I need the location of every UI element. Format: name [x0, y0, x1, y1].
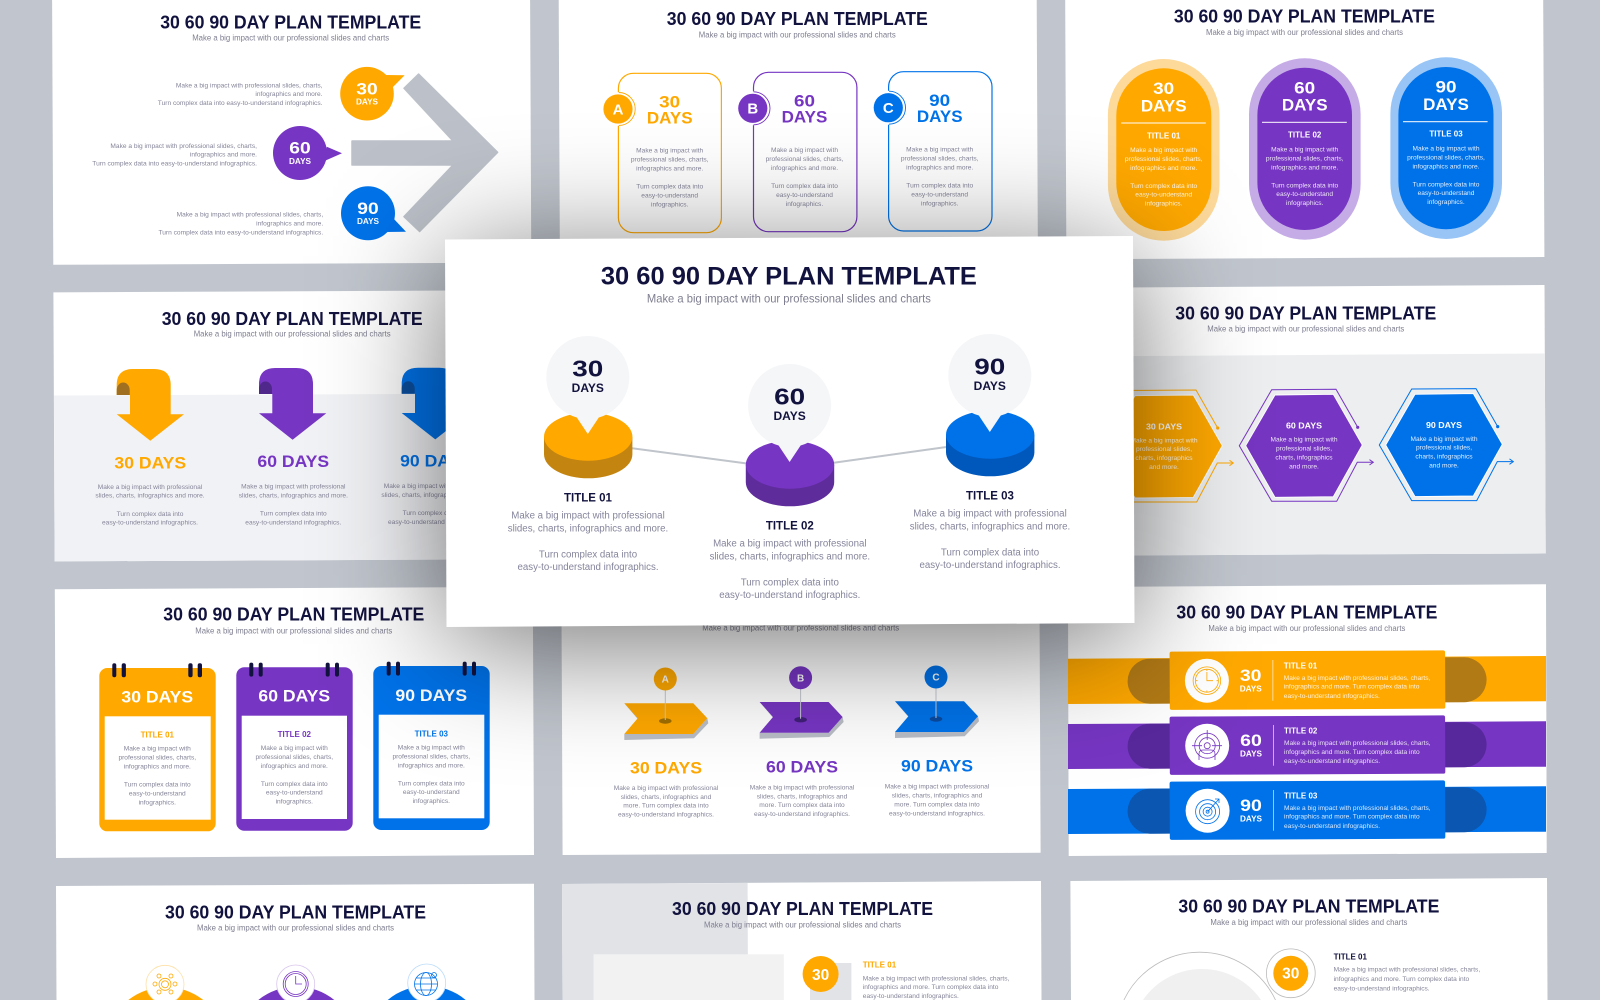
card B: professional slides, charts,	[766, 156, 844, 163]
text block: Make a big impact with professional slides, charts,	[1334, 967, 1480, 974]
icon: purple arrow	[259, 368, 326, 440]
pin 30 days: 30	[572, 356, 603, 382]
pin 90 days: Make a big impact with professional	[913, 509, 1067, 520]
bubble: 60 days	[273, 126, 342, 180]
calendar card 60 days: professional slides, charts,	[255, 754, 333, 761]
calendar card 30 days: infographics and more.	[124, 764, 191, 771]
pin 30 days: slides, charts, infographics and more.	[508, 524, 668, 535]
subtitle: Make a big impact with our professional slides and charts	[197, 922, 394, 932]
pin 60 days: TITLE 02	[766, 521, 814, 533]
heading 90 days: 90 DAYS	[901, 758, 973, 776]
text block 30: Turn complex data into	[117, 511, 184, 518]
pin 60 days: slides, charts, infographics and more.	[710, 552, 870, 563]
pill 90 days: professional slides, charts,	[1407, 154, 1485, 161]
card C: infographics.	[921, 200, 959, 207]
text block: infographics and more. Turn complex data into	[863, 984, 999, 991]
text block 90: slides, charts, infographics and more.	[381, 492, 491, 499]
hexagon 60 days	[1239, 389, 1373, 501]
calendar card 90 days: infographics.	[413, 798, 450, 805]
card B: Make a big impact with	[771, 147, 838, 154]
text block 60: infographics and more.	[190, 152, 257, 159]
pin 30 days: TITLE 01	[564, 493, 613, 505]
calendar card 60 days: TITLE 02	[278, 730, 312, 739]
hexagon 60 days: professional slides,	[1276, 445, 1332, 452]
calendar card 60 days: infographics and more.	[261, 763, 328, 770]
bubble: 60 days: 60	[289, 138, 311, 157]
band 60 days: infographics and more. Turn complex data into	[1284, 749, 1420, 756]
hexagon 90 days: 90 DAYS	[1426, 421, 1463, 430]
icon: grey arrow	[352, 74, 498, 232]
card C: C	[883, 100, 894, 117]
calendar card 30 days: infographics.	[139, 799, 176, 806]
pill 30 days: infographics and more.	[1130, 165, 1197, 172]
calendar card 30 days: TITLE 01	[141, 731, 175, 740]
calendar card 30 days: professional slides, charts,	[118, 755, 196, 762]
pin 60 days: Make a big impact with professional	[713, 539, 867, 550]
bubble: 60 days: DAYS	[289, 157, 312, 166]
card A: DAYS	[647, 108, 693, 127]
calendar card 90 days: infographics and more.	[398, 762, 465, 769]
arc icon people	[128, 965, 203, 1000]
hexagon 30 days: 30 DAYS	[1146, 422, 1183, 431]
bubble: 30 days: DAYS	[356, 98, 379, 107]
subtitle: Make a big impact with our professional slides and charts	[194, 329, 391, 339]
calendar card 90 days: 90 DAYS	[395, 687, 467, 705]
number 30: 30	[812, 967, 829, 984]
text block 30: more. Turn complex data into	[623, 803, 709, 810]
icon: blue arrow	[402, 368, 469, 439]
title: 30 60 90 DAY PLAN TEMPLATE	[163, 604, 424, 625]
circle diagram	[1124, 952, 1276, 1000]
hexagon 30 days	[1099, 390, 1233, 502]
pill 90 days: TITLE 03	[1429, 130, 1463, 139]
card B: Turn complex data into	[771, 183, 838, 190]
text block 60: Make a big impact with professional	[241, 484, 346, 491]
hexagon 60 days: 60 DAYS	[1286, 422, 1323, 431]
pill 60 days: TITLE 02	[1288, 130, 1322, 139]
chevron pin A	[624, 668, 708, 740]
text block 90: Make a big impact with professional	[885, 784, 990, 791]
calendar card 90 days: TITLE 03	[415, 729, 449, 738]
text block: infographics and more. Turn complex data into	[1334, 976, 1470, 983]
band 30 days: infographics and more. Turn complex data into	[1284, 684, 1420, 691]
chevron pin B: B	[797, 673, 804, 684]
band 30 days: 30	[1240, 666, 1262, 685]
pill 90 days: Turn complex data into	[1413, 181, 1480, 188]
text block 60: slides, charts, infographics and more.	[239, 492, 348, 499]
calendar card 30 days: easy-to-understand	[129, 790, 186, 797]
calendar card 90 days: Turn complex data into	[398, 780, 465, 787]
card B: infographics and more.	[771, 165, 838, 172]
card A: Turn complex data into	[636, 184, 703, 191]
text block 30: Make a big impact with professional	[614, 785, 719, 792]
panel: outlined cards slide	[559, 0, 1038, 262]
band 90 days: 90	[1240, 796, 1262, 815]
chevron pin A: A	[662, 675, 669, 686]
bubble: 90 days: 90	[357, 199, 379, 218]
calendar card 90 days: Make a big impact with	[398, 744, 465, 751]
calendar card 60 days: Turn complex data into	[261, 781, 328, 788]
text block: easy-to-understand infographics.	[863, 993, 959, 1000]
title: 30 60 90 DAY PLAN TEMPLATE	[165, 901, 426, 922]
pill 60 days: professional slides, charts,	[1266, 155, 1344, 162]
calendar card 60 days	[236, 663, 353, 831]
card C: Make a big impact with	[906, 146, 974, 153]
card A: professional slides, charts,	[631, 157, 709, 164]
heading 30 days: 30 DAYS	[114, 454, 186, 472]
text block 30: Make a big impact with professional	[98, 484, 203, 491]
pill 90 days: 90	[1436, 79, 1456, 97]
calendar card 60 days: Make a big impact with	[261, 745, 328, 752]
title: 30 60 90 DAY PLAN TEMPLATE	[162, 308, 423, 329]
text block 60: Turn complex data into easy-to-understand infographics.	[92, 161, 257, 168]
pill 60 days: Make a big impact with	[1271, 146, 1339, 153]
panel: down arrows slide	[53, 290, 533, 561]
text block 30: Make a big impact with professional slides, charts,	[176, 82, 323, 89]
heading 60 days: 60 DAYS	[257, 453, 329, 471]
card B: easy-to-understand	[776, 192, 833, 199]
calendar card 60 days: infographics.	[276, 799, 313, 806]
pin 30 days: easy-to-understand infographics.	[517, 562, 659, 573]
number 30: 30	[1282, 966, 1299, 983]
pill 60 days: infographics.	[1286, 200, 1324, 207]
text block 30: easy-to-understand infographics.	[102, 520, 198, 527]
pill 30 days: infographics.	[1145, 201, 1183, 208]
card B: B	[747, 101, 758, 118]
band 90 days: infographics and more. Turn complex data into	[1284, 814, 1420, 821]
bubble: 90 days: DAYS	[357, 217, 380, 226]
card A: 30	[659, 92, 680, 111]
hexagon 90 days: professional slides,	[1416, 445, 1472, 452]
pill 30 days: TITLE 01	[1147, 131, 1181, 140]
card B: 60	[794, 92, 815, 111]
number 30	[803, 956, 851, 1000]
band 90 days: TITLE 03	[1284, 791, 1318, 800]
text block 60: easy-to-understand infographics.	[754, 811, 850, 818]
pill 90 days	[1390, 57, 1502, 239]
card C: professional slides, charts,	[901, 155, 979, 162]
title: 30 60 90 DAY PLAN TEMPLATE	[1178, 895, 1439, 916]
pill 30 days: Make a big impact with	[1130, 147, 1198, 154]
heading 30 days: 30 DAYS	[630, 759, 702, 777]
card C: 90	[929, 91, 950, 110]
arc icon globe	[388, 964, 466, 1000]
pin 30 days: Make a big impact with professional	[511, 511, 665, 522]
calendar card 30 days: Make a big impact with	[124, 746, 191, 753]
band 30 days: DAYS	[1240, 685, 1262, 694]
subtitle: Make a big impact with our professional slides and charts	[1206, 27, 1403, 37]
hexagon 60 days: and more.	[1289, 463, 1319, 470]
band 90 days: DAYS	[1240, 814, 1263, 823]
subtitle: Make a big impact with our professional slides and charts	[699, 29, 896, 39]
title 01: TITLE 01	[1334, 953, 1367, 962]
pin 90 days: TITLE 03	[966, 491, 1014, 503]
band 60 days: Make a big impact with professional slides, charts,	[1284, 740, 1431, 747]
title: 30 60 90 DAY PLAN TEMPLATE	[160, 12, 421, 32]
heading 60 days: 60 DAYS	[766, 758, 838, 776]
panel: chevron pins slide	[561, 585, 1041, 855]
band 60 days: easy-to-understand infographics.	[1284, 758, 1380, 765]
pin 90 days: Turn complex data into	[941, 547, 1039, 558]
text block 90: easy-to-understand infographics.	[889, 810, 985, 817]
hexagon 60 days: Make a big impact with	[1270, 437, 1338, 444]
card A: Make a big impact with	[636, 148, 704, 155]
pin 30 days: DAYS	[572, 381, 604, 395]
calendar card 30 days	[99, 663, 216, 831]
title: 30 60 90 DAY PLAN TEMPLATE	[601, 262, 977, 290]
text block 60: Make a big impact with professional slides, charts,	[110, 143, 257, 150]
pin 90 days	[910, 334, 1070, 571]
pill 90 days: easy-to-understand	[1418, 190, 1475, 197]
title: 30 60 90 DAY PLAN TEMPLATE	[1176, 602, 1437, 623]
pin 60 days	[710, 364, 870, 601]
pill 60 days: 60	[1294, 79, 1315, 97]
subtitle: Make a big impact with our professional slides and charts	[1210, 917, 1407, 927]
text block 60: slides, charts, infographics and	[757, 793, 848, 800]
calendar card 90 days	[373, 662, 490, 830]
text block 60: Make a big impact with professional	[750, 784, 855, 791]
subtitle: Make a big impact with our professional slides and charts	[195, 625, 392, 635]
subtitle: Make a big impact with our professional slides and charts	[1207, 324, 1404, 334]
band 60 days	[1068, 715, 1546, 775]
pin 60 days: DAYS	[773, 409, 806, 423]
chevron pin C: C	[932, 673, 940, 684]
pill 60 days: infographics and more.	[1271, 164, 1338, 171]
hexagon 90 days: and more.	[1429, 463, 1459, 470]
text block 60: easy-to-understand infographics.	[245, 519, 341, 526]
card A	[602, 73, 721, 233]
pin 60 days: Turn complex data into	[741, 577, 839, 588]
text block 30: easy-to-understand infographics.	[618, 812, 714, 819]
panel: numbered list slide	[562, 881, 1042, 1000]
text block 30: slides, charts, infographics and more.	[95, 493, 205, 500]
hexagon 30 days: Make a big impact with	[1130, 437, 1198, 444]
pill 90 days: Make a big impact with	[1412, 145, 1480, 152]
text block 30: slides, charts, infographics and	[621, 794, 712, 801]
heading 90 days: 90 DAYS	[400, 452, 472, 470]
text block 90: slides, charts, infographics and	[892, 793, 983, 800]
pin 30 days: Turn complex data into	[539, 549, 637, 560]
calendar card 60 days: 60 DAYS	[258, 688, 330, 706]
band 90 days	[1068, 780, 1546, 840]
bubble: 30 days	[340, 67, 405, 120]
text block 90: Make a big impact with professional	[384, 483, 489, 490]
subtitle: Make a big impact with our professional slides and charts	[192, 32, 389, 42]
pill 90 days: infographics.	[1427, 199, 1465, 206]
card B	[736, 72, 857, 232]
number 30	[1266, 949, 1315, 998]
card A: easy-to-understand	[641, 193, 698, 200]
text block 90: infographics and more.	[256, 221, 323, 228]
band 90 days: Make a big impact with professional slides, charts,	[1284, 805, 1431, 812]
hexagon 90 days: Make a big impact with	[1410, 436, 1478, 443]
panel: pill cards slide	[1065, 0, 1544, 259]
band 90 days: easy-to-understand infographics.	[1284, 823, 1380, 830]
text block 60: Turn complex data into	[260, 511, 327, 518]
main panel: pins on discs	[445, 236, 1134, 627]
title: 30 60 90 DAY PLAN TEMPLATE	[672, 898, 933, 919]
main panel shadow	[446, 256, 1134, 644]
card B: infographics.	[786, 201, 823, 208]
pill 30 days: professional slides, charts,	[1125, 156, 1203, 163]
band 30 days: easy-to-understand infographics.	[1284, 693, 1380, 700]
hexagon 90 days	[1379, 389, 1513, 501]
pin 90 days: DAYS	[974, 379, 1006, 393]
calendar card 30 days: Turn complex data into	[124, 782, 191, 789]
bubble: 30 days: 30	[356, 79, 378, 98]
pill 60 days: DAYS	[1282, 96, 1328, 115]
panel: icon arcs slide	[56, 884, 534, 1000]
panel: hexagons slide	[1066, 285, 1546, 556]
pill 30 days: 30	[1153, 80, 1174, 98]
text block 90: Make a big impact with professional slides, charts,	[177, 212, 323, 219]
subtitle: Make a big impact with our professional slides and charts	[702, 622, 899, 632]
pill 30 days: Turn complex data into	[1130, 183, 1197, 190]
title: 30 60 90 DAY PLAN TEMPLATE	[1175, 302, 1436, 323]
hexagon 90 days: charts, infographics	[1415, 454, 1473, 461]
pill 60 days: Turn complex data into	[1271, 182, 1338, 189]
panel: speech bubbles and arrow slide	[52, 0, 531, 265]
card C: easy-to-understand	[911, 191, 968, 198]
panel: circle diagram slide	[1070, 878, 1548, 1000]
hexagon 30 days: and more.	[1149, 464, 1179, 471]
pin 30 days	[508, 336, 668, 573]
pin 90 days: slides, charts, infographics and more.	[910, 522, 1070, 533]
title: 30 60 90 DAY PLAN TEMPLATE	[1174, 6, 1435, 27]
bubble: 90 days	[341, 186, 406, 240]
text block 90: easy-to-understand infographics.	[388, 519, 484, 526]
card B: DAYS	[782, 108, 827, 127]
calendar card 30 days: 30 DAYS	[121, 688, 193, 706]
title: 30 60 90 DAY PLAN TEMPLATE	[670, 601, 931, 622]
text block 30: infographics and more.	[255, 91, 323, 98]
pill 90 days: DAYS	[1423, 95, 1469, 114]
band 30 days: Make a big impact with professional slides, charts,	[1284, 675, 1431, 682]
calendar card 90 days: easy-to-understand	[403, 789, 460, 796]
card C: DAYS	[917, 107, 963, 126]
text block: easy-to-understand infographics.	[1334, 985, 1430, 992]
chevron pin C	[895, 666, 979, 738]
pin 90 days: easy-to-understand infographics.	[919, 560, 1061, 571]
card A: A	[613, 101, 624, 118]
band 30 days	[1068, 650, 1546, 710]
card A: infographics.	[651, 202, 689, 209]
icon: orange arrow	[117, 369, 184, 441]
band 30 days: TITLE 01	[1284, 661, 1318, 670]
subtitle: Make a big impact with our professional slides and charts	[1208, 623, 1405, 633]
text block 60: more. Turn complex data into	[759, 802, 845, 809]
card C: Turn complex data into	[906, 182, 973, 189]
card A: infographics and more.	[636, 166, 703, 173]
pill 30 days: DAYS	[1141, 96, 1187, 115]
connector lines	[630, 446, 950, 464]
text block: Make a big impact with professional slides, charts,	[863, 975, 1010, 982]
hexagon 30 days: professional slides,	[1136, 446, 1192, 453]
hexagon 30 days: charts, infographics	[1135, 455, 1193, 462]
pin 60 days: 60	[774, 384, 805, 410]
title 01: TITLE 01	[863, 961, 897, 970]
panel: calendar cards slide	[55, 587, 534, 858]
pill 60 days	[1249, 58, 1361, 240]
pin 60 days: easy-to-understand infographics.	[719, 590, 860, 601]
title: 30 60 90 DAY PLAN TEMPLATE	[667, 8, 928, 29]
image placeholder	[594, 954, 784, 1000]
card C: infographics and more.	[906, 164, 973, 171]
pill 30 days: easy-to-understand	[1135, 192, 1192, 199]
band 60 days: DAYS	[1240, 750, 1263, 759]
text block 90: more. Turn complex data into	[894, 801, 980, 808]
pill 30 days	[1108, 59, 1220, 241]
pin 90 days: 90	[974, 354, 1005, 380]
band 60 days: TITLE 02	[1284, 726, 1318, 735]
pill 90 days: infographics and more.	[1412, 163, 1480, 170]
subtitle: Make a big impact with our professional slides and charts	[704, 920, 901, 930]
band 60 days: 60	[1240, 731, 1262, 750]
pill 60 days: easy-to-understand	[1276, 191, 1333, 198]
calendar card 60 days: easy-to-understand	[266, 790, 323, 797]
arc icon clock	[258, 965, 334, 1000]
hexagon 60 days: charts, infographics	[1275, 454, 1333, 461]
subtitle: Make a big impact with our professional slides and charts	[647, 292, 931, 306]
panel: horizontal bands slide	[1068, 584, 1547, 856]
card C	[872, 72, 992, 231]
text block 30: Turn complex data into easy-to-understand infographics.	[158, 100, 323, 107]
calendar card 90 days: professional slides, charts,	[392, 753, 470, 760]
text block 90: Turn complex data into	[403, 510, 470, 517]
chevron pin B	[760, 666, 844, 739]
text block 90: Turn complex data into easy-to-understand infographics.	[158, 230, 323, 237]
